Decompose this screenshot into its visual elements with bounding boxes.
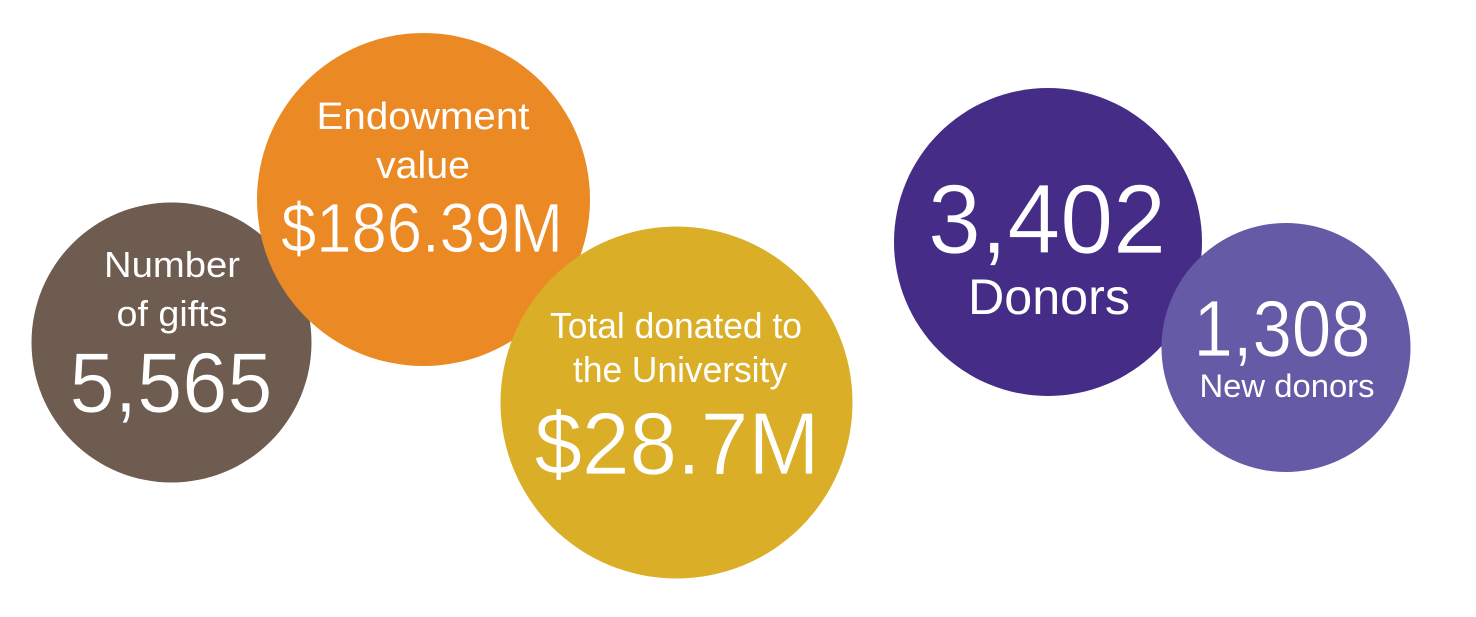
circle: number of gifts: Number bbox=[104, 244, 240, 285]
circle: total donated: $28.7M bbox=[534, 394, 820, 493]
circle: endowment value bbox=[257, 33, 590, 366]
circle: number of gifts bbox=[32, 202, 312, 482]
circle: number of gifts: of gifts bbox=[116, 293, 228, 334]
circle: donors: Donors bbox=[968, 269, 1130, 325]
circle: donors bbox=[894, 88, 1202, 396]
circle: total donated: Total donated to bbox=[550, 305, 802, 346]
circle: endowment value: Endowment bbox=[316, 96, 530, 138]
circle: number of gifts: 5,565 bbox=[70, 336, 272, 431]
circle: endowment value: value bbox=[376, 145, 470, 187]
circle: total donated: the University bbox=[573, 349, 787, 390]
circle: new donors bbox=[1162, 223, 1410, 472]
circle: endowment value: $186.39M bbox=[281, 189, 563, 267]
circle: new donors: 1,308 bbox=[1194, 284, 1370, 373]
circle: new donors: New donors bbox=[1200, 368, 1374, 404]
circle: donors: 3,402 bbox=[928, 164, 1166, 274]
circle: total donated bbox=[500, 226, 852, 578]
